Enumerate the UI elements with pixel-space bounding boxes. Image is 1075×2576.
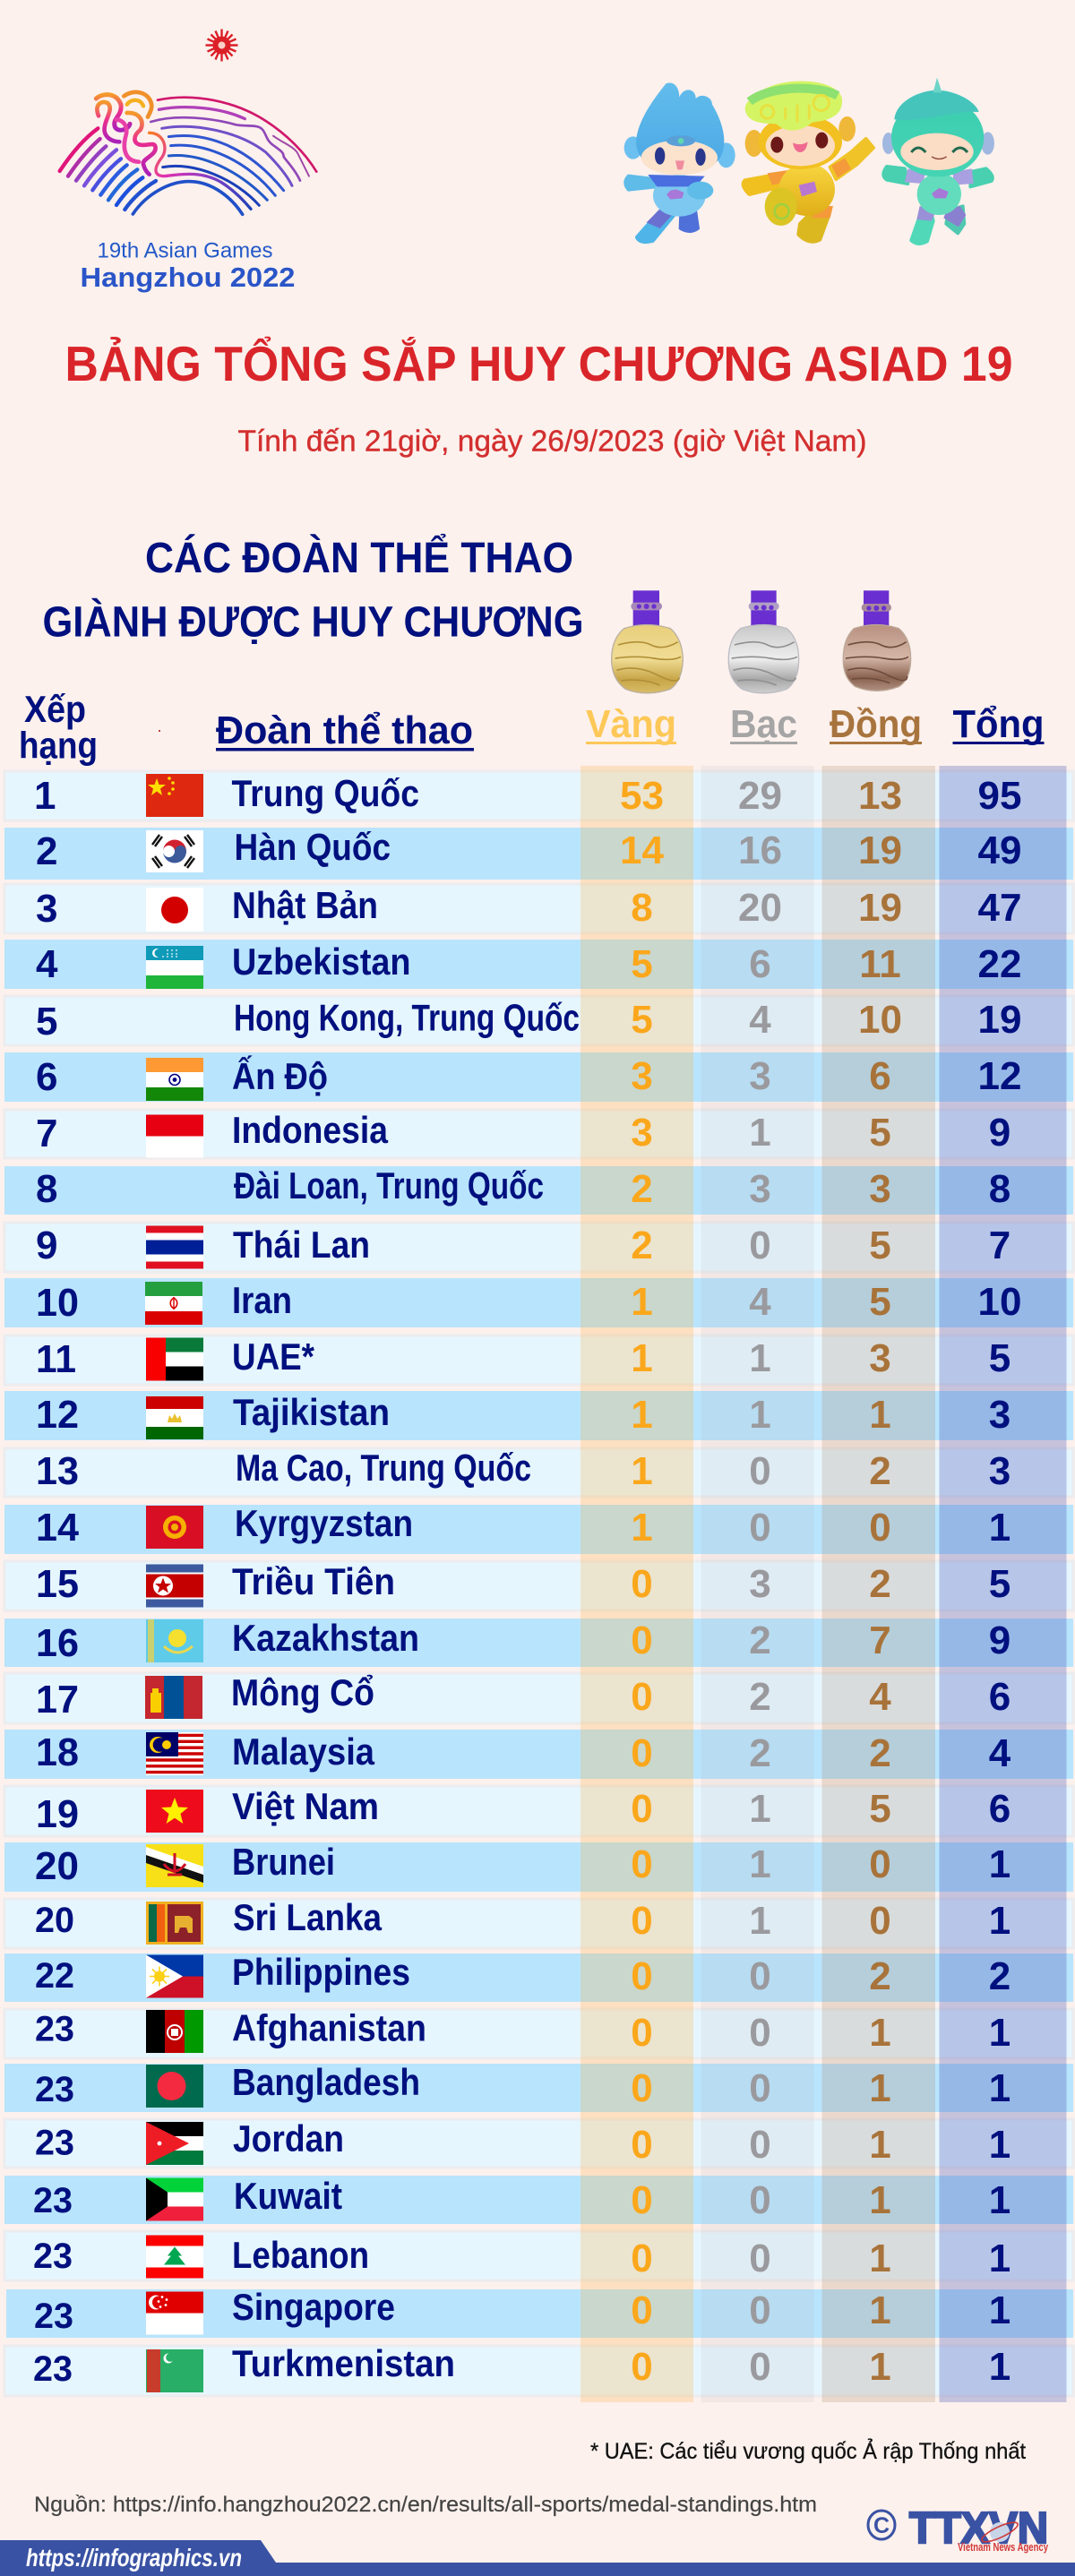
row 25: Jordan: 0: [749, 2123, 771, 2167]
flag: Indonesia: [146, 1114, 203, 1157]
row 27: Lebanon: 1: [989, 2237, 1010, 2280]
row 13: Ma Cao, Trung Quốc: Ma Cao, Trung Quốc: [236, 1447, 531, 1489]
mascots: [624, 78, 994, 244]
row 4: Uzbekistan: 6: [749, 942, 771, 986]
row 17: Mông Cổ: [36, 1671, 1010, 1722]
row 10: Iran: 5: [869, 1280, 891, 1324]
row 9: Thái Lan: 7: [989, 1224, 1010, 1267]
icon: silver medal: [728, 590, 799, 693]
icon: logo arcs: [60, 92, 316, 214]
row 28: Singapore: [34, 2286, 1010, 2336]
row 18: Malaysia: 4: [989, 1731, 1011, 1775]
row 28: Singapore: 0: [631, 2288, 653, 2332]
row 23: Afghanistan: [35, 2006, 1010, 2055]
table header: hạng: [19, 724, 98, 767]
row 13: Ma Cao, Trung Quốc: 0: [749, 1449, 771, 1493]
logo: TTXVN: C: [873, 2513, 890, 2538]
row 4: Uzbekistan: Uzbekistan: [232, 940, 410, 983]
row 1: Trung Quốc: 1: [34, 774, 56, 818]
flag: Tajikistan: [146, 1396, 203, 1439]
icon: red sun: [206, 29, 238, 61]
row 27: Lebanon: Lebanon: [232, 2234, 369, 2276]
row 20: Brunei: 0: [869, 1842, 891, 1886]
flag: China: [146, 774, 203, 817]
row 8: Đài Loan, Trung Quốc: [36, 1164, 1010, 1211]
row 6: Ấn Độ: 3: [749, 1054, 771, 1098]
icon: bronze medal: [843, 590, 911, 691]
row 11: UAE*: 1: [749, 1336, 771, 1380]
flag: Lebanon: [146, 2236, 203, 2279]
row 17: Mông Cổ: 0: [631, 1675, 653, 1719]
row 3: Nhật Bản: Nhật Bản: [232, 884, 378, 926]
logo: TTXVN: TTXVN: [909, 2504, 1048, 2553]
flag: South Korea: [146, 830, 203, 872]
row 14: Kyrgyzstan: 0: [869, 1506, 891, 1550]
row 16: Kazakhstan: 7: [869, 1619, 891, 1662]
flag: UAE: [146, 1338, 203, 1381]
row 1: Trung Quốc: 95: [978, 774, 1021, 818]
row 1: Trung Quốc: 53: [620, 774, 664, 818]
row 10: Iran: [36, 1279, 1021, 1325]
flag: Vietnam: [146, 1790, 203, 1833]
row 25: Jordan: 0: [631, 2123, 653, 2167]
row 23: Afghanistan: 0: [631, 2011, 653, 2055]
row 18: Malaysia: 0: [631, 1731, 653, 1775]
row 24: Bangladesh: 1: [869, 2066, 891, 2110]
flag: Turkmenistan: [146, 2349, 203, 2392]
row 21: Sri Lanka: 1: [749, 1899, 771, 1943]
row 7: Indonesia: 5: [869, 1111, 891, 1155]
row 9: Thái Lan: 0: [749, 1224, 771, 1267]
row 26: Kuwait: 0: [749, 2178, 771, 2222]
row 3: Nhật Bản: 3: [36, 887, 57, 931]
row 19: Việt Nam: 1: [749, 1787, 771, 1831]
row 25: Jordan: 1: [989, 2123, 1010, 2167]
row 4: Uzbekistan: 5: [631, 942, 653, 986]
row 28: Singapore: 1: [989, 2288, 1010, 2332]
row 24: Bangladesh: 0: [631, 2066, 653, 2110]
row 9: Thái Lan: 2: [631, 1224, 653, 1267]
row 1: Trung Quốc: 13: [858, 774, 902, 818]
row 29: Turkmenistan: Turkmenistan: [232, 2342, 455, 2384]
row 29: Turkmenistan: [33, 2342, 1010, 2392]
flag: Kazakhstan: [146, 1619, 203, 1662]
row 19: Việt Nam: 6: [989, 1787, 1010, 1831]
row 27: Lebanon: 0: [631, 2237, 653, 2280]
row 12: Tajikistan: 1: [631, 1393, 653, 1437]
flag: Sri Lanka: [146, 1902, 203, 1945]
row 14: Kyrgyzstan: [36, 1502, 1010, 1550]
row 2: Hàn Quốc: 2: [36, 829, 57, 873]
row 11: UAE*: 1: [631, 1336, 653, 1380]
column: total: [939, 766, 1066, 2402]
row 6: Ấn Độ: 12: [978, 1054, 1021, 1098]
row 12: Tajikistan: [36, 1391, 1010, 1439]
subtitle: Tính đến 21giờ, ngày 26/9/2023 (giờ Việt Nam): [238, 425, 867, 457]
section heading: [43, 534, 584, 647]
row 21: Sri Lanka: [35, 1896, 1010, 1945]
row 3: Nhật Bản: [36, 884, 1021, 932]
row 20: Brunei: Brunei: [232, 1841, 335, 1883]
row 7: Indonesia: 9: [989, 1111, 1010, 1155]
table header: Đồng: [830, 702, 922, 746]
row 22: Philippines: [35, 1951, 1010, 1998]
row 21: Sri Lanka: 0: [869, 1899, 891, 1943]
flag: Jordan: [146, 2122, 203, 2165]
flag: Kyrgyzstan: [146, 1506, 203, 1549]
table header: [19, 688, 1045, 767]
medals: [612, 590, 911, 693]
row 12: Tajikistan: 12: [36, 1393, 79, 1437]
section heading: GIÀNH ĐƯỢC HUY CHƯƠNG: [43, 598, 584, 647]
row 24: Bangladesh: Bangladesh: [232, 2061, 420, 2103]
row 6: Ấn Độ: 3: [631, 1054, 653, 1098]
logo text: 19th Asian Games: [97, 238, 272, 263]
row 15: Triều Tiên: [36, 1560, 1010, 1607]
row 25: Jordan: [35, 2117, 1010, 2167]
row 13: Ma Cao, Trung Quốc: 3: [989, 1449, 1010, 1493]
table header: Tổng: [953, 702, 1045, 746]
row 15: Triều Tiên: 5: [989, 1562, 1010, 1606]
row 18: Malaysia: 2: [869, 1731, 891, 1775]
row 27: Lebanon: 23: [33, 2237, 73, 2276]
flag: Thailand: [146, 1225, 203, 1268]
row 26: Kuwait: [33, 2175, 1010, 2222]
row 15: Triều Tiên: 2: [869, 1562, 891, 1606]
row 13: Ma Cao, Trung Quốc: 13: [36, 1449, 79, 1493]
flag: Brunei: [146, 1844, 203, 1887]
row 25: Jordan: Jordan: [233, 2117, 344, 2160]
row 6: Ấn Độ: [36, 1054, 1021, 1101]
row backgrounds: [4, 771, 1073, 2396]
icon: teal mascot: [882, 78, 994, 244]
row 16: Kazakhstan: 2: [749, 1619, 771, 1662]
flag: Mongolia: [145, 1676, 202, 1719]
row 5: Hong Kong, Trung Quốc: [36, 996, 1021, 1043]
row 8: Đài Loan, Trung Quốc: 3: [869, 1167, 891, 1211]
row 21: Sri Lanka: 0: [631, 1899, 653, 1943]
row 1: Trung Quốc: 29: [738, 774, 782, 818]
row 28: Singapore: 1: [869, 2288, 891, 2332]
row 10: Iran: 10: [36, 1281, 79, 1325]
row 25: Jordan: 1: [869, 2123, 891, 2167]
row 9: Thái Lan: [36, 1224, 1010, 1268]
row 12: Tajikistan: 3: [989, 1393, 1010, 1437]
row 17: Mông Cổ: 17: [36, 1678, 79, 1722]
row 19: Việt Nam: 5: [869, 1787, 891, 1831]
row 1: Trung Quốc: [34, 772, 1021, 818]
flag: Japan: [146, 888, 203, 932]
row 21: Sri Lanka: 20: [35, 1901, 74, 1940]
row 18: Malaysia: 2: [749, 1731, 771, 1775]
row 11: UAE*: [36, 1335, 1010, 1381]
row 19: Việt Nam: 19: [36, 1792, 79, 1836]
row 5: Hong Kong, Trung Quốc: 10: [858, 998, 902, 1042]
footer bar: https://infographics.vn: [26, 2544, 242, 2572]
row 20: Brunei: 20: [35, 1844, 79, 1888]
row 17: Mông Cổ: Mông Cổ: [231, 1671, 374, 1713]
row 11: UAE*: UAE*: [232, 1335, 315, 1378]
logo: Hangzhou 2022 Asian Games: Hangzhou 2022: [81, 262, 296, 293]
row 7: Indonesia: 1: [749, 1111, 771, 1155]
flag: Bangladesh: [146, 2065, 203, 2108]
flag: Singapore: [146, 2291, 203, 2334]
row 6: Ấn Độ: Ấn Độ: [232, 1055, 328, 1097]
row 2: Hàn Quốc: Hàn Quốc: [235, 826, 391, 868]
title: BẢNG TỔNG SẮP HUY CHƯƠNG ASIAD 19: [64, 336, 1012, 391]
table header: Đoàn thể thao: [216, 708, 473, 752]
column: silver: [701, 766, 813, 2402]
row 23: Afghanistan: 23: [35, 2010, 74, 2049]
row 2: Hàn Quốc: 49: [978, 829, 1021, 872]
row 22: Philippines: 2: [869, 1954, 891, 1998]
row 29: Turkmenistan: 1: [989, 2345, 1010, 2389]
row 28: Singapore: 0: [749, 2288, 771, 2332]
row 8: Đài Loan, Trung Quốc: 8: [36, 1167, 57, 1211]
row 3: Nhật Bản: 47: [978, 886, 1021, 930]
row 27: Lebanon: 1: [869, 2237, 891, 2280]
row 25: Jordan: 23: [35, 2123, 74, 2162]
row 11: UAE*: 5: [989, 1336, 1010, 1380]
row 16: Kazakhstan: [36, 1617, 1010, 1665]
row 24: Bangladesh: 0: [749, 2066, 771, 2110]
row 22: Philippines: 0: [749, 1954, 771, 1998]
row 23: Afghanistan: 1: [869, 2011, 891, 2055]
footnote: * UAE: Các tiểu vương quốc Ả rập Thống nhất: [590, 2437, 1026, 2464]
row 3: Nhật Bản: 20: [738, 886, 782, 930]
row 28: Singapore: Singapore: [232, 2286, 395, 2328]
row 4: Uzbekistan: 11: [859, 942, 901, 986]
row 13: Ma Cao, Trung Quốc: 1: [631, 1449, 653, 1493]
row 24: Bangladesh: 1: [989, 2066, 1010, 2110]
flag: North Korea: [146, 1564, 203, 1607]
row 22: Philippines: 22: [35, 1956, 74, 1996]
row 12: Tajikistan: Tajikistan: [233, 1391, 390, 1433]
row 12: Tajikistan: 1: [749, 1393, 771, 1437]
table header: Vàng: [586, 702, 676, 746]
flag: India: [146, 1058, 203, 1101]
row 5: Hong Kong, Trung Quốc: Hong Kong, Trung Quốc: [234, 996, 580, 1039]
row 24: Bangladesh: [35, 2061, 1010, 2110]
icon: gold medal: [612, 590, 683, 693]
row 14: Kyrgyzstan: 14: [36, 1506, 80, 1550]
row 11: UAE*: 11: [36, 1337, 76, 1381]
row 26: Kuwait: 1: [869, 2178, 891, 2222]
flag: Malaysia: [146, 1732, 203, 1775]
row 9: Thái Lan: 5: [869, 1224, 891, 1267]
flag: Kuwait: [146, 2178, 203, 2221]
row 15: Triều Tiên: 3: [749, 1562, 771, 1606]
row 16: Kazakhstan: 9: [989, 1619, 1010, 1662]
row 4: Uzbekistan: 4: [36, 942, 58, 986]
row 17: Mông Cổ: 2: [749, 1675, 771, 1719]
row 6: Ấn Độ: 6: [869, 1054, 891, 1098]
row 3: Nhật Bản: 19: [858, 886, 902, 930]
row 22: Philippines: 2: [989, 1954, 1010, 1998]
row 18: Malaysia: 18: [36, 1730, 79, 1774]
row 3: Nhật Bản: 8: [631, 886, 653, 930]
row 15: Triều Tiên: Triều Tiên: [232, 1560, 395, 1602]
row 20: Brunei: [35, 1841, 1010, 1888]
row 11: UAE*: 3: [869, 1336, 891, 1380]
row 24: Bangladesh: 23: [35, 2070, 74, 2109]
row 20: Brunei: 1: [749, 1842, 771, 1886]
row 5: Hong Kong, Trung Quốc: 5: [631, 998, 653, 1042]
source: Nguồn: https://info.hangzhou2022.cn/en/results/all-sports/medal-standings.htm: [34, 2493, 817, 2517]
row 26: Kuwait: 0: [631, 2178, 653, 2222]
row 15: Triều Tiên: 0: [631, 1562, 653, 1606]
row 7: Indonesia: 3: [631, 1111, 653, 1155]
row 23: Afghanistan: 1: [989, 2011, 1010, 2055]
row 27: Lebanon: [33, 2234, 1010, 2280]
row 27: Lebanon: 0: [749, 2237, 771, 2280]
row 5: Hong Kong, Trung Quốc: 19: [978, 998, 1021, 1042]
row 12: Tajikistan: 1: [869, 1393, 891, 1437]
row 8: Đài Loan, Trung Quốc: 3: [749, 1167, 771, 1211]
row 28: Singapore: 23: [34, 2297, 73, 2336]
row 14: Kyrgyzstan: 1: [989, 1506, 1010, 1550]
row 9: Thái Lan: Thái Lan: [233, 1224, 370, 1266]
row 2: Hàn Quốc: 14: [620, 829, 664, 872]
row 19: Việt Nam: [36, 1785, 1010, 1836]
row 14: Kyrgyzstan: 0: [749, 1506, 771, 1550]
row 16: Kazakhstan: 16: [36, 1621, 79, 1665]
row 20: Brunei: 1: [989, 1842, 1010, 1886]
row 6: Ấn Độ: 6: [36, 1055, 57, 1099]
row 7: Indonesia: [36, 1109, 1010, 1157]
row 10: Iran: 10: [978, 1280, 1021, 1324]
row 7: Indonesia: 7: [36, 1112, 57, 1155]
row 21: Sri Lanka: Sri Lanka: [233, 1896, 383, 1938]
row 13: Ma Cao, Trung Quốc: [36, 1447, 1010, 1493]
row 18: Malaysia: Malaysia: [232, 1730, 375, 1773]
row 5: Hong Kong, Trung Quốc: 5: [36, 1000, 57, 1043]
row 29: Turkmenistan: 1: [869, 2345, 891, 2389]
row 4: Uzbekistan: [36, 940, 1021, 989]
table header: Bạc: [730, 702, 797, 746]
row 10: Iran: 4: [749, 1280, 771, 1324]
row 23: Afghanistan: 0: [749, 2011, 771, 2055]
row 26: Kuwait: 1: [989, 2178, 1010, 2222]
table header: Xếp: [24, 688, 86, 730]
row 15: Triều Tiên: 15: [36, 1562, 79, 1606]
row 2: Hàn Quốc: [36, 826, 1021, 873]
row 21: Sri Lanka: 1: [989, 1899, 1010, 1943]
row 14: Kyrgyzstan: 1: [631, 1506, 653, 1550]
row 8: Đài Loan, Trung Quốc: Đài Loan, Trung Quốc: [234, 1164, 544, 1206]
row 9: Thái Lan: 9: [36, 1224, 57, 1267]
row 8: Đài Loan, Trung Quốc: 8: [989, 1167, 1010, 1211]
column: gold: [580, 766, 693, 2402]
row 23: Afghanistan: Afghanistan: [232, 2006, 426, 2049]
row 19: Việt Nam: 0: [631, 1787, 653, 1831]
row 17: Mông Cổ: 4: [869, 1675, 891, 1719]
row 19: Việt Nam: Việt Nam: [232, 1785, 379, 1827]
row 7: Indonesia: Indonesia: [232, 1109, 389, 1151]
row 4: Uzbekistan: 22: [978, 942, 1021, 986]
row 22: Philippines: Philippines: [232, 1951, 410, 1993]
footer bar: [0, 2540, 1075, 2576]
column: bronze: [822, 766, 935, 2402]
section heading: CÁC ĐOÀN THỂ THAO: [145, 534, 573, 582]
row 5: Hong Kong, Trung Quốc: 4: [749, 998, 771, 1042]
row 26: Kuwait: Kuwait: [234, 2175, 342, 2217]
row 26: Kuwait: 23: [33, 2181, 73, 2220]
flag: Philippines: [146, 1954, 203, 1997]
row 16: Kazakhstan: 0: [631, 1619, 653, 1662]
row 17: Mông Cổ: 6: [989, 1675, 1010, 1719]
row 29: Turkmenistan: 23: [33, 2349, 73, 2389]
icon: blue mascot: [624, 82, 735, 241]
row 29: Turkmenistan: 0: [749, 2345, 771, 2389]
row 2: Hàn Quốc: 19: [858, 829, 902, 872]
row 2: Hàn Quốc: 16: [738, 829, 782, 872]
row 8: Đài Loan, Trung Quốc: 2: [631, 1167, 653, 1211]
icon: yellow mascot: [744, 82, 873, 241]
flag: Uzbekistan: [146, 946, 203, 989]
row 22: Philippines: 0: [631, 1954, 653, 1998]
row 14: Kyrgyzstan: Kyrgyzstan: [235, 1502, 413, 1544]
logo: Hangzhou 2022 Asian Games: [60, 29, 316, 293]
row 10: Iran: Iran: [232, 1279, 292, 1321]
row 10: Iran: 1: [631, 1280, 653, 1324]
row 20: Brunei: 0: [631, 1842, 653, 1886]
row 29: Turkmenistan: 0: [631, 2345, 653, 2389]
flag: Iran: [145, 1282, 202, 1325]
row 13: Ma Cao, Trung Quốc: 2: [869, 1449, 891, 1493]
flag: Afghanistan: [146, 2010, 203, 2053]
row 16: Kazakhstan: Kazakhstan: [232, 1617, 419, 1659]
row 18: Malaysia: [36, 1730, 1011, 1775]
row 1: Trung Quốc: Trung Quốc: [231, 772, 419, 814]
